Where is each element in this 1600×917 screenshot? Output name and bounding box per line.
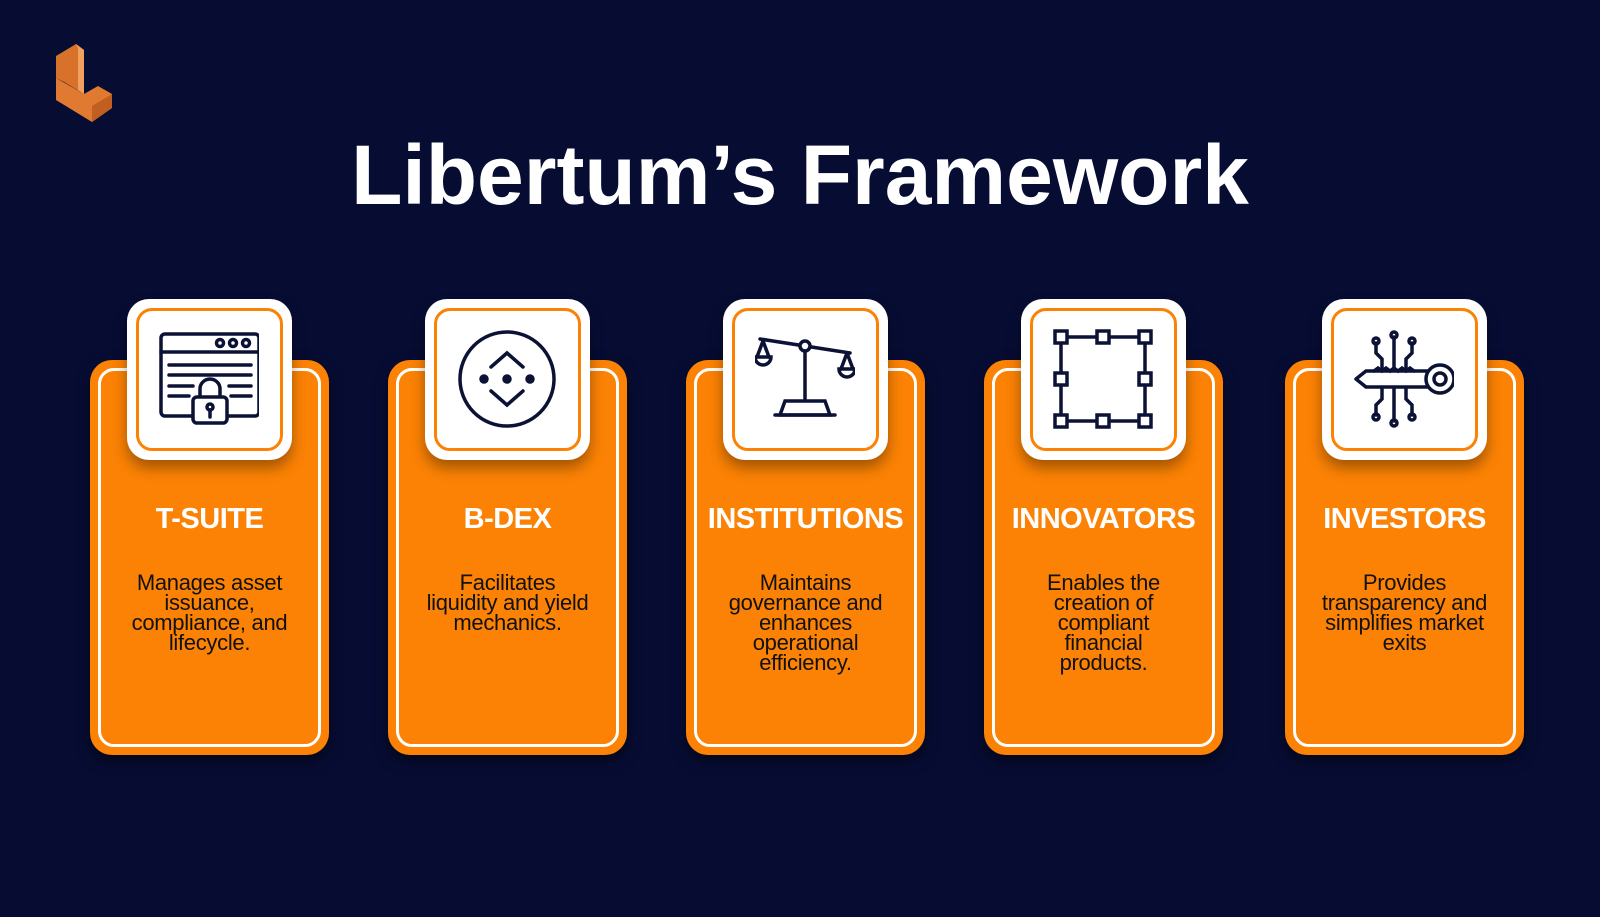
- card: INVESTORS: simplifies market: [1325, 610, 1484, 635]
- icon: circle diamond: [425, 299, 590, 460]
- card: T-SUITE: [90, 360, 329, 755]
- card: T-SUITE: compliance, and: [132, 610, 287, 635]
- card: INNOVATORS: [984, 360, 1223, 755]
- card: INVESTORS: exits: [1383, 630, 1426, 655]
- card: INNOVATORS: INNOVATORS: [1012, 503, 1195, 535]
- card: INSTITUTIONS: INSTITUTIONS: [708, 503, 903, 535]
- card: B-DEX: liquidity and yield: [427, 590, 588, 615]
- card: T-SUITE: T-SUITE: [156, 503, 263, 535]
- card: INNOVATORS: creation of: [1054, 590, 1153, 615]
- card: INSTITUTIONS: efficiency.: [759, 650, 852, 675]
- icon: scale: [723, 299, 888, 460]
- card: B-DEX: mechanics.: [453, 610, 562, 635]
- card: B-DEX: B-DEX: [464, 503, 551, 535]
- card: INSTITUTIONS: [686, 360, 925, 755]
- card: INVESTORS: INVESTORS: [1323, 503, 1486, 535]
- card: INSTITUTIONS: Maintains: [760, 570, 851, 595]
- card: INSTITUTIONS: enhances: [759, 610, 852, 635]
- card: T-SUITE: issuance,: [164, 590, 255, 615]
- icon: browser lock: [127, 299, 292, 460]
- card: INSTITUTIONS: governance and: [729, 590, 882, 615]
- card: B-DEX: [388, 360, 627, 755]
- title: Libertum’s Framework: [351, 128, 1249, 222]
- logo: [56, 44, 112, 122]
- card: INNOVATORS: Enables the: [1047, 570, 1160, 595]
- card: INNOVATORS: products.: [1060, 650, 1147, 675]
- card: B-DEX: Facilitates: [460, 570, 555, 595]
- card: INNOVATORS: financial: [1064, 630, 1143, 655]
- card: T-SUITE: Manages asset: [137, 570, 282, 595]
- icon: frame: [1021, 299, 1186, 460]
- card: INSTITUTIONS: operational: [753, 630, 858, 655]
- card: INVESTORS: transparency and: [1322, 590, 1487, 615]
- card: INVESTORS: [1285, 360, 1524, 755]
- card: INNOVATORS: compliant: [1058, 610, 1149, 635]
- icon: digital key: [1322, 299, 1487, 460]
- card: INVESTORS: Provides: [1363, 570, 1446, 595]
- card: T-SUITE: lifecycle.: [169, 630, 250, 655]
